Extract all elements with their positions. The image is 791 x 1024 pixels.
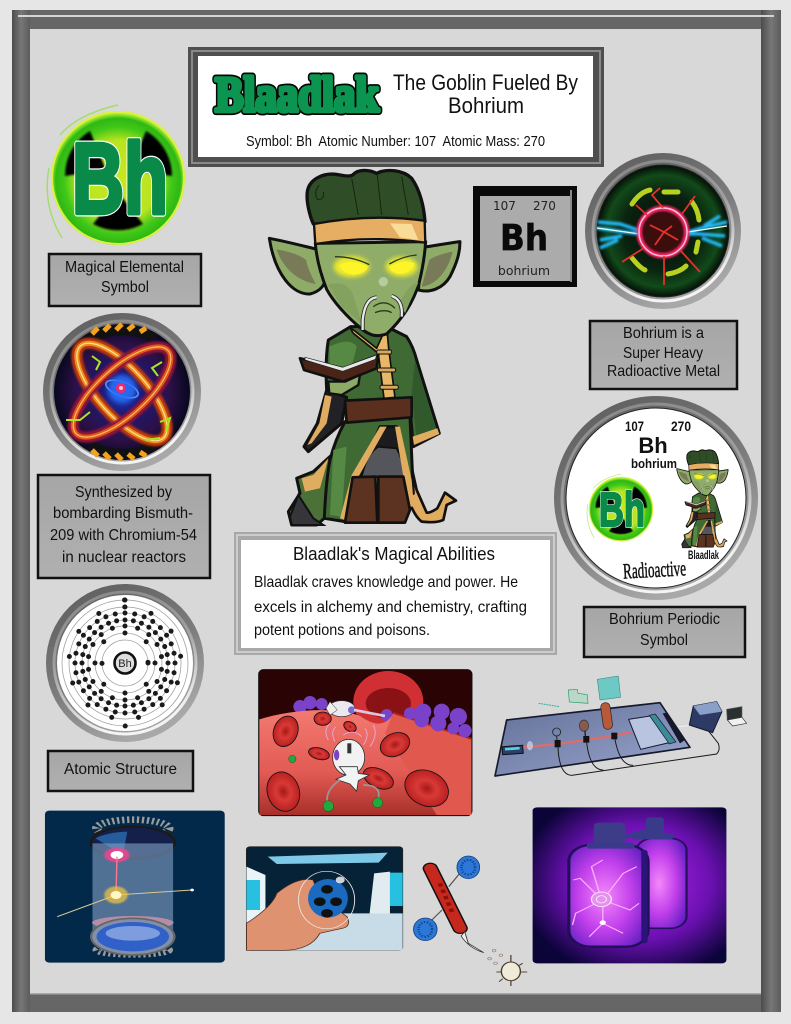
label: super heavy radioactive metal: Super Heavy <box>623 345 703 362</box>
bohrium periodic symbol medallion: 270 <box>671 418 691 434</box>
character: Blaadlak the goblin <box>269 170 460 525</box>
periodic table tile: 107 <box>493 199 516 213</box>
bohrium periodic symbol medallion: Blaadlak <box>688 550 719 562</box>
bohrium periodic symbol medallion: Radioactive <box>622 555 687 584</box>
panel: magical abilities <box>234 532 557 655</box>
subtitle: The Goblin Fueled By <box>393 70 578 95</box>
label: atomic structure <box>48 751 193 791</box>
label: magical elemental symbol: Magical Elemental <box>65 259 184 276</box>
illustration: particle collider chamber <box>45 811 225 963</box>
label: synthesized by bombarding: in nuclear reactors <box>62 549 186 566</box>
bohrium periodic symbol medallion: bohrium <box>631 456 677 471</box>
label: atomic structure: Atomic Structure <box>64 761 177 778</box>
label: super heavy radioactive metal <box>590 321 737 389</box>
label: bohrium periodic symbol <box>584 607 745 657</box>
icon: plasma orb <box>585 153 741 309</box>
label: synthesized by bombarding: 209 with Chromium-54 <box>50 527 197 544</box>
label: bohrium periodic symbol: Symbol <box>640 632 688 649</box>
logo: Blaadlak: Blaadlak <box>215 66 379 122</box>
abilities heading: Blaadlak's Magical Abilities <box>293 544 495 564</box>
abilities body text: excels in alchemy and chemistry, crafting <box>254 599 527 616</box>
label: bohrium periodic symbol: Bohrium Periodic <box>609 611 720 628</box>
label: super heavy radioactive metal: Radioactive Metal <box>607 363 720 380</box>
bohrium periodic symbol medallion: 107 <box>625 418 644 434</box>
label: super heavy radioactive metal: Bohrium is a <box>623 325 704 342</box>
abilities body text: potent potions and poisons. <box>254 622 430 639</box>
bohrium periodic symbol medallion <box>554 396 758 600</box>
subtitle: Bohrium <box>448 93 524 118</box>
atomic structure diagram: Bh <box>118 658 132 670</box>
label: synthesized by bombarding <box>38 475 210 578</box>
illustration: hand with hologram <box>246 847 403 950</box>
element facts line: Symbol: Bh Atomic Number: 107 Atomic Mass: 270 <box>246 134 545 150</box>
abilities body text <box>254 574 527 639</box>
periodic table tile: 270 <box>533 199 556 213</box>
periodic table tile: Bh <box>500 218 548 259</box>
icon: atom with orbits <box>43 313 201 471</box>
illustration: red tube with clusters <box>414 856 527 986</box>
atomic structure diagram <box>46 584 204 742</box>
bohrium periodic symbol medallion: Bh <box>638 433 668 458</box>
mini elemental symbol <box>587 474 653 541</box>
mini goblin <box>677 450 728 548</box>
periodic table tile <box>473 186 577 287</box>
title panel <box>188 47 604 167</box>
subtitle <box>393 70 578 118</box>
label: magical elemental symbol <box>49 254 201 306</box>
illustration: purple plasma bottles <box>533 807 726 963</box>
abilities body text: Blaadlak craves knowledge and power. He <box>254 574 518 591</box>
label: magical elemental symbol: Symbol <box>101 279 149 296</box>
label: synthesized by bombarding: bombarding Bismuth- <box>53 505 193 522</box>
illustration: nanobots in blood vessel <box>259 670 472 816</box>
label: synthesized by bombarding: Synthesized by <box>75 484 172 501</box>
periodic table tile: bohrium <box>498 263 550 278</box>
icon: magical elemental symbol <box>47 105 185 245</box>
illustration: laser circuit board <box>495 676 747 776</box>
logo: Blaadlak: Blaadlak <box>215 66 379 122</box>
